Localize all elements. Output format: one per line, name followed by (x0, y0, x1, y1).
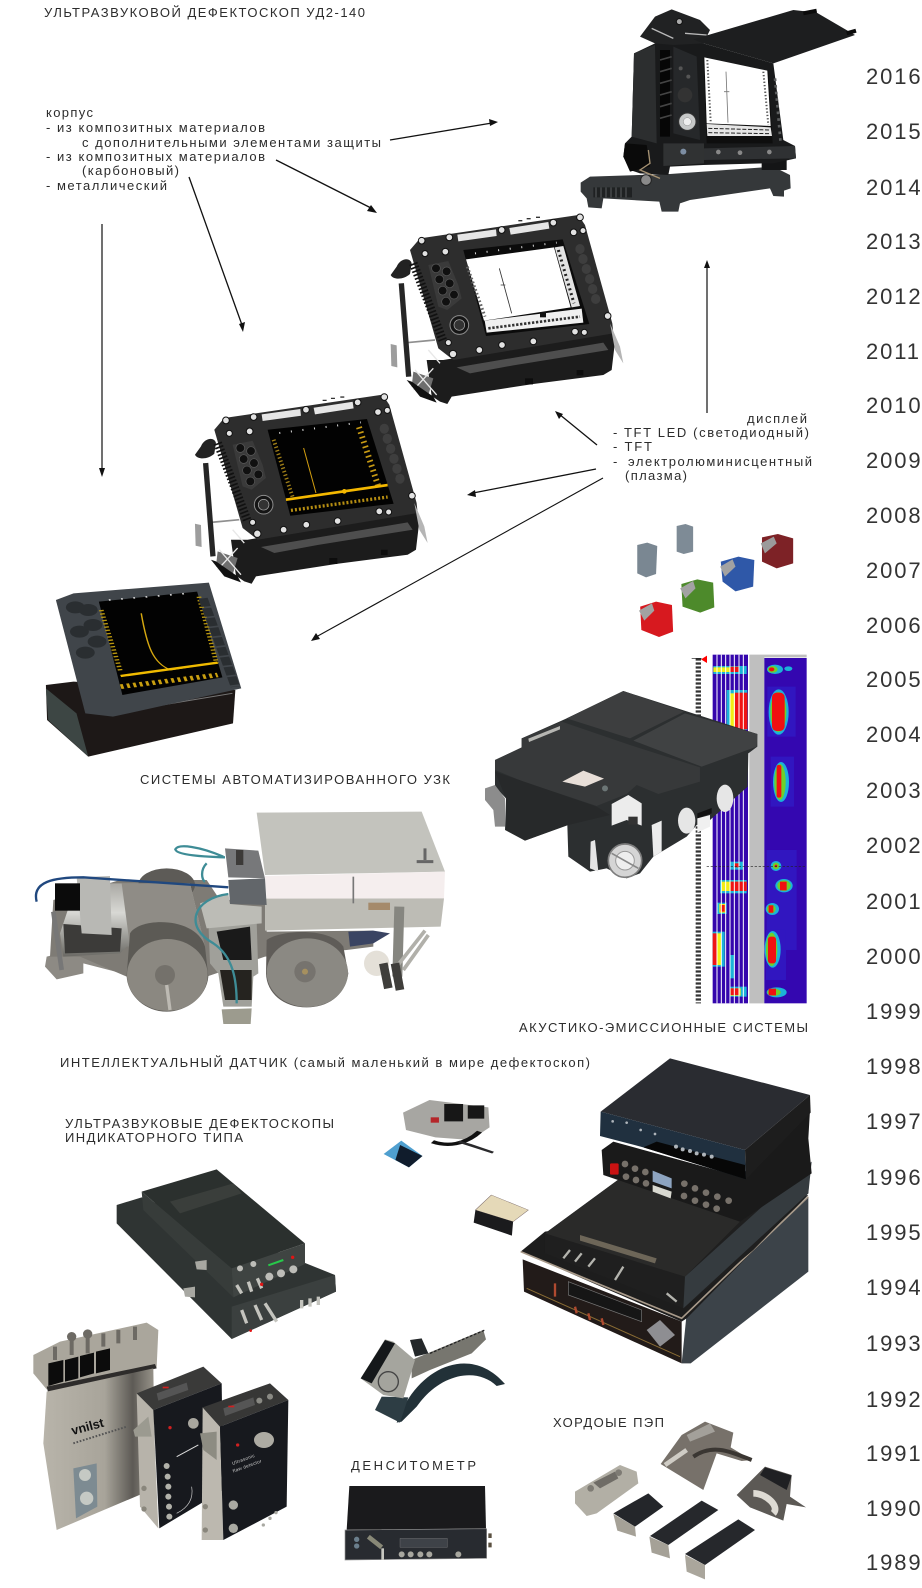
year 2003: 2003 (866, 778, 922, 803)
text block: housing types (46, 105, 381, 193)
year 1989: 1989 (866, 1550, 922, 1575)
middle unit (602, 1110, 812, 1222)
connectors (399, 1551, 461, 1557)
small chord probe (613, 1493, 663, 1537)
blue probe (720, 557, 754, 591)
year 2008: 2008 (866, 503, 922, 528)
arrow: plasma to oldest device (311, 478, 603, 641)
silver band (77, 876, 112, 935)
channel strip (713, 655, 748, 1003)
top plates (567, 691, 684, 738)
shoe arc (397, 1363, 505, 1423)
body and frame (623, 33, 796, 175)
text block: display types: - TFT LED (светодиодный) (613, 425, 809, 440)
top unit (600, 1058, 811, 1179)
year 2001: 2001 (866, 889, 922, 914)
top block (640, 9, 710, 45)
chart: acoustic emission scan (692, 655, 807, 1003)
labels (562, 771, 604, 787)
green probe (680, 579, 714, 613)
amplitude strip (764, 658, 807, 1003)
base (581, 167, 791, 212)
lid (693, 10, 855, 63)
title: УЛЬТРАЗВУКОВОЙ ДЕФЕКТОСКОП УД2-140 (44, 5, 365, 20)
year 2010: 2010 (866, 393, 922, 418)
third unit (545, 1160, 812, 1308)
text block: display types: - TFT (613, 439, 652, 454)
bottom box (521, 1195, 808, 1363)
rear wheel (127, 922, 208, 1012)
year 2015: 2015 (866, 119, 922, 144)
year 2004: 2004 (866, 722, 922, 747)
text block: display types: электролюминисцентный (628, 454, 812, 469)
detector panel (133, 1367, 223, 1528)
wheel (608, 844, 642, 877)
year 1994: 1994 (866, 1275, 922, 1300)
probes: coloured ultrasonic transducers (637, 524, 793, 637)
panel (56, 583, 241, 717)
right curved probe (737, 1467, 806, 1521)
year 2011: 2011 (866, 339, 921, 364)
clips (590, 840, 598, 872)
sensor head (403, 1100, 490, 1140)
body (495, 691, 757, 878)
device: vnilst metal-body detector (33, 1323, 288, 1540)
arrow: TFT LED to carbon device (555, 411, 597, 445)
front (345, 1529, 487, 1560)
device: 2016 flaw detector with open lid (581, 9, 856, 212)
arrow: composite housing to 2016 device (390, 119, 498, 140)
year 2013: 2013 (866, 229, 922, 254)
rear support (762, 157, 787, 170)
lower shadow (495, 772, 610, 841)
device: carbon-body detector with light screen (391, 214, 623, 404)
silver probe (575, 1465, 638, 1516)
text block: housing types: (карбоновый) (82, 163, 179, 178)
grey probe (637, 543, 657, 577)
caption: densitometer: ДЕНСИТОМЕТР (351, 1458, 476, 1473)
arrow: metal housing down (99, 224, 105, 477)
year 1996: 1996 (866, 1165, 922, 1190)
device: acoustic emission scanner (485, 691, 757, 878)
long chord probe (685, 1519, 755, 1579)
red probe (639, 602, 673, 637)
arrow: display up to 2016 device (704, 260, 710, 413)
year 1990: 1990 (866, 1496, 922, 1521)
device: automated UT scanner (36, 812, 445, 1024)
blue cable (384, 1141, 422, 1167)
side dial windows (678, 808, 695, 834)
rear bracket (45, 948, 128, 979)
text block: housing types: - из композитных материалов (46, 120, 265, 135)
lower unit (117, 1197, 336, 1339)
dark red probe (761, 534, 793, 568)
device: metal-body detector with plasma display (46, 583, 241, 757)
text block: housing types: с дополнительными элементами защиты (82, 135, 381, 150)
side keys (203, 598, 235, 687)
year 1998: 1998 (866, 1054, 922, 1079)
front controls (268, 1260, 283, 1265)
year 2014: 2014 (866, 175, 922, 200)
frame (195, 394, 428, 584)
position marker (707, 866, 807, 868)
device: small sensor cube (474, 1195, 528, 1236)
device: intelligent sensor (384, 1100, 493, 1167)
text block: housing types: - из композитных материалов (46, 149, 265, 164)
arrow: TFT to second device (467, 469, 596, 497)
motor cylinder (60, 883, 205, 957)
front wheel (266, 932, 348, 1007)
right arm (348, 907, 428, 990)
year 2006: 2006 (866, 613, 922, 638)
device: VR-09 indicator detector (117, 1169, 336, 1339)
arrows (99, 119, 710, 641)
connector crown (33, 1323, 158, 1393)
caption: indicator-type detectors: УЛЬТРАЗВУКОВЫЕ ДЕФЕКТОСКОПЫ (65, 1116, 334, 1131)
arrow: carbon housing to second device (189, 177, 245, 332)
hinge bar and clamp (703, 146, 796, 160)
teal cable (175, 846, 237, 1003)
screen (99, 592, 222, 695)
curved chord probe (661, 1422, 752, 1490)
caption: chord probes: ХОРДОЫЕ ПЭП (553, 1415, 664, 1430)
bracket (361, 1339, 415, 1398)
year 2005: 2005 (866, 667, 922, 692)
centre mechanism (208, 921, 258, 1007)
timeline of years (866, 64, 922, 1575)
year 2012: 2012 (866, 284, 922, 309)
text block: display types: дисплей (747, 411, 807, 426)
year 2002: 2002 (866, 833, 922, 858)
main box (257, 812, 445, 931)
year 2000: 2000 (866, 944, 922, 969)
screen (703, 57, 773, 143)
caption: acoustic emission systems: АКУСТИКО-ЭМИССИОННЫЕ СИСТЕМЫ (519, 1020, 808, 1035)
device: stacked detector units (521, 1058, 812, 1363)
grey probe (677, 524, 693, 554)
upper unit (142, 1169, 305, 1268)
text block: housing types: - металлический (46, 178, 167, 193)
year 1995: 1995 (866, 1220, 922, 1245)
year 2016: 2016 (866, 64, 922, 89)
caption: intelligent sensor: ИНТЕЛЛЕКТУАЛЬНЫЙ ДАТЧИК (самый маленький в мире дефектоскоп) (60, 1055, 590, 1070)
blue cable (36, 877, 228, 902)
rear wheel top (138, 868, 195, 902)
detector panel with rotary switch (141, 1383, 288, 1540)
latch (612, 795, 642, 826)
hologram patch (73, 1463, 97, 1518)
frame (391, 214, 623, 404)
arrow: composite housing to carbon device (276, 160, 377, 213)
screen: dark with yellow trace (268, 419, 394, 516)
detector panel with rotary switch: flaw detector (232, 1458, 263, 1474)
backing silhouette (50, 880, 373, 977)
year 2007: 2007 (866, 558, 922, 583)
connector blocks (225, 848, 265, 878)
year 1991: 1991 (866, 1441, 922, 1466)
year 1992: 1992 (866, 1387, 922, 1412)
silver body (43, 1368, 155, 1530)
top (347, 1486, 486, 1530)
text block: display types (613, 411, 812, 483)
detector panel with rotary switch: Ultrasonic (231, 1453, 256, 1466)
group: chord probes (575, 1422, 806, 1579)
year 1999: 1999 (866, 999, 922, 1024)
device: composite detector with dark screen (195, 394, 428, 584)
caption: indicator-type detectors (65, 1116, 334, 1145)
long chord probe (649, 1501, 718, 1558)
caption: automated systems: СИСТЕМЫ АВТОМАТИЗИРОВАННОГО УЗК (140, 772, 450, 787)
screen: light (463, 239, 589, 336)
caption: indicator-type detectors: ИНДИКАТОРНОГО ТИПА (65, 1130, 243, 1145)
keypad (66, 601, 107, 659)
grey gutter (749, 655, 807, 1003)
device: densitometer (345, 1486, 492, 1560)
text block: display types: - (613, 454, 617, 469)
right strip (775, 78, 781, 143)
brand: vnilst (70, 1416, 106, 1438)
year 2009: 2009 (866, 448, 922, 473)
year 1993: 1993 (866, 1331, 922, 1356)
case (46, 682, 235, 757)
year 1997: 1997 (866, 1109, 922, 1134)
depth ruler (690, 658, 706, 1003)
device: curved pipe probe (361, 1330, 505, 1423)
text block: display types: (плазма) (625, 468, 687, 483)
text block: housing types: корпус (46, 105, 94, 120)
